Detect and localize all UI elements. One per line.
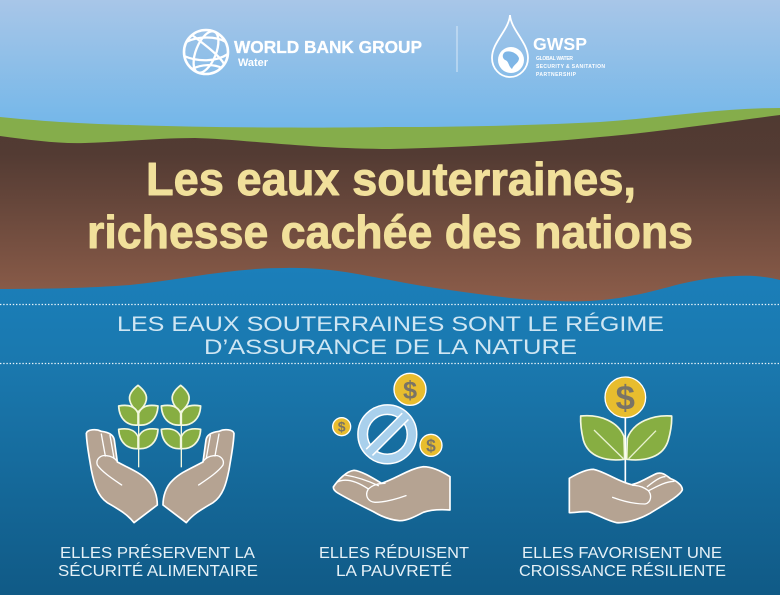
- caption: resilient growth: CROISSANCE RÉSILIENTE: [519, 563, 726, 580]
- prohibition sign: [363, 410, 412, 459]
- title: richesse cachée des nations: [87, 206, 693, 258]
- small coin: $: [338, 419, 346, 435]
- caption: food security: [58, 545, 258, 580]
- title: Les eaux souterraines,: [146, 153, 636, 205]
- caption: resilient growth: ELLES FAVORISENT UNE: [522, 545, 722, 562]
- sky background: [0, 0, 780, 135]
- plant stem: [623, 417, 628, 484]
- subtitle: LES EAUX SOUTERRAINES SONT LE RÉGIME: [117, 313, 664, 336]
- left leaf: [581, 416, 625, 460]
- wheat plant right: [161, 385, 201, 467]
- wordmark: WORLD BANK GROUP: [234, 37, 422, 57]
- subtitle: [117, 313, 664, 359]
- caption: food security: ELLES PRÉSERVENT LA: [60, 545, 256, 562]
- green ground layer: [0, 108, 780, 170]
- coin flower: $: [616, 380, 635, 418]
- small coin: [333, 418, 351, 436]
- icon: hand holding plant with coin: [569, 377, 682, 523]
- large coin: [394, 373, 426, 405]
- open hand: [569, 469, 682, 523]
- icon: globe: [184, 28, 228, 76]
- open hand: [333, 467, 450, 521]
- caption: poverty: [319, 545, 470, 580]
- GWSP full name: GLOBAL WATER: [536, 56, 573, 62]
- logo: GWSP: [492, 15, 605, 78]
- GWSP full name: [536, 56, 605, 78]
- medium coin: $: [426, 436, 436, 456]
- GWSP wordmark: GWSP: [533, 34, 587, 54]
- logo: World Bank Group Water: [184, 28, 422, 76]
- icon: hand, coins and prohibition sign: [333, 373, 450, 521]
- caption: poverty: ELLES RÉDUISENT: [319, 545, 470, 562]
- caption: resilient growth: [519, 545, 726, 580]
- right leaf: [627, 416, 672, 460]
- large coin: $: [403, 376, 417, 404]
- GWSP full name: SECURITY & SANITATION: [536, 64, 605, 70]
- subtitle: D’ASSURANCE DE LA NATURE: [204, 336, 577, 359]
- GWSP full name: PARTNERSHIP: [536, 72, 577, 78]
- title: [87, 153, 693, 258]
- brown soil layer: [0, 115, 780, 310]
- caption: food security: SÉCURITÉ ALIMENTAIRE: [58, 563, 258, 580]
- medium coin: [420, 434, 442, 456]
- icon: water drop with globe: [492, 15, 528, 77]
- water label: Water: [238, 57, 269, 69]
- left hand: [86, 430, 157, 523]
- coin flower: [605, 377, 646, 418]
- right hand: [163, 430, 234, 523]
- logo divider: [456, 26, 458, 72]
- wheat plant left: [119, 385, 158, 467]
- icon: hands holding crops: [86, 385, 234, 523]
- groundwater area: [0, 268, 780, 595]
- caption: poverty: LA PAUVRETÉ: [336, 563, 452, 580]
